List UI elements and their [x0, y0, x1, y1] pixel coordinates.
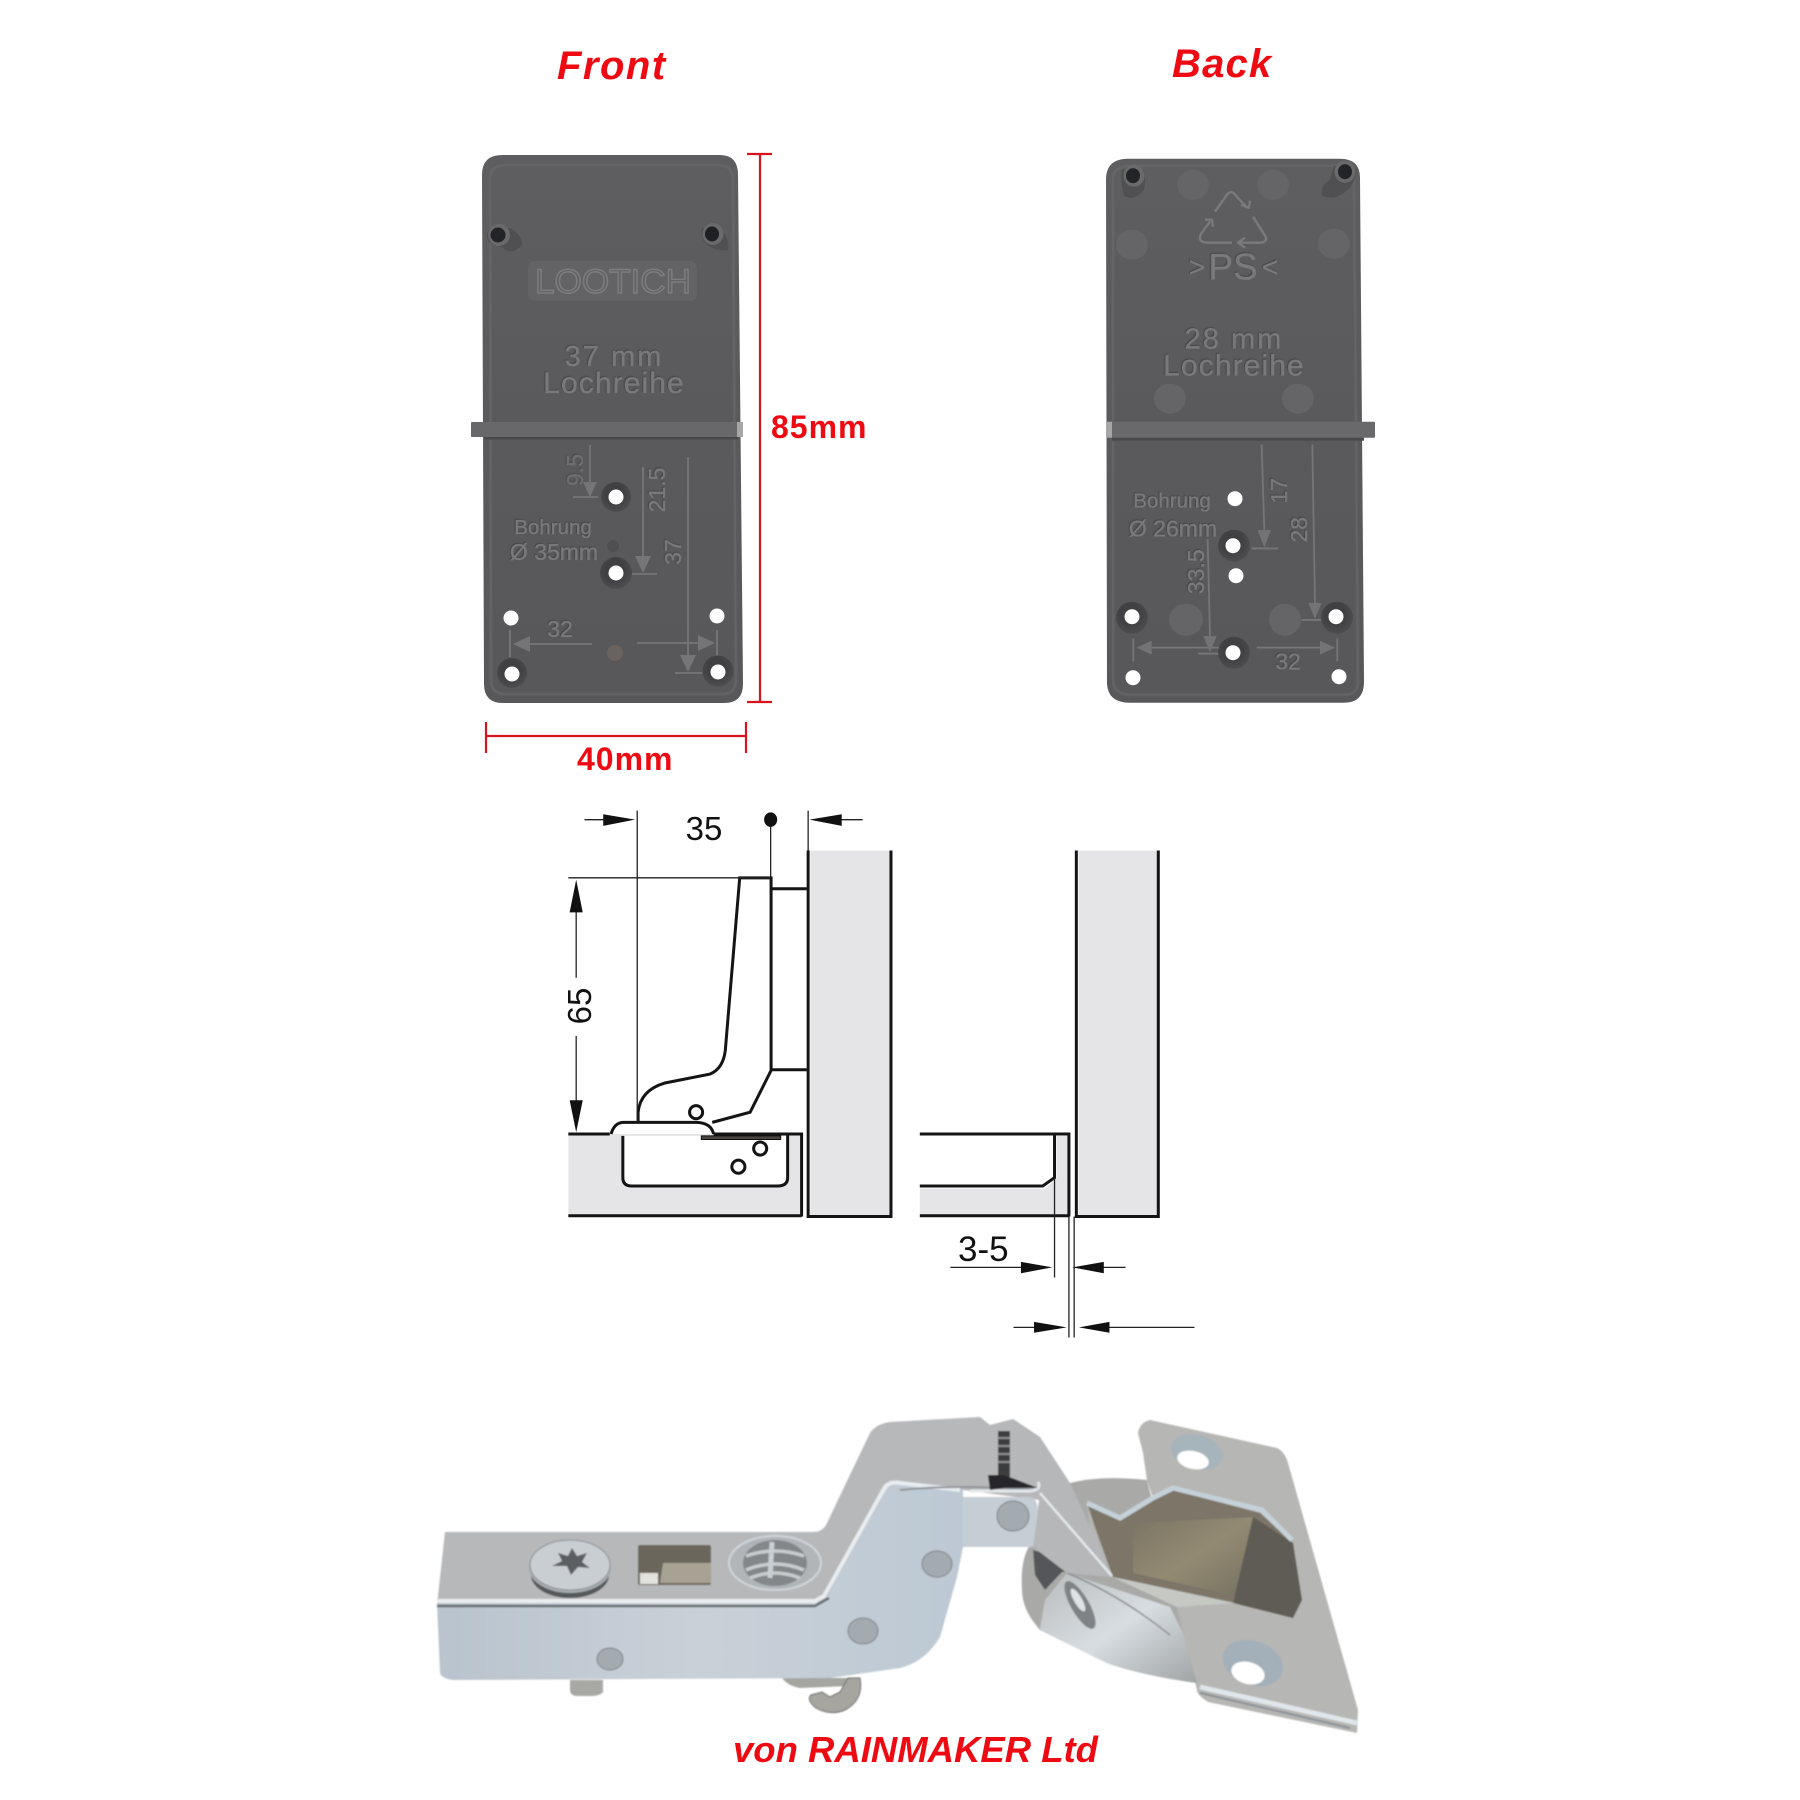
embossed labels: drill size and measures: 21.5: [644, 468, 670, 512]
embossed recycling code: PS: >: [1189, 252, 1205, 283]
panel fills: [920, 851, 1158, 1216]
embossed labels: drill size and measures: 32: [547, 616, 573, 642]
door side panel fills: [568, 851, 891, 1216]
lower link with slot: [1033, 1550, 1197, 1683]
rivets: [597, 1501, 1029, 1670]
embossed text: 37 mm Lochreihe: Lochreihe: [543, 367, 685, 400]
dimension: 85mm height: [747, 154, 868, 702]
right section: reveal detail: [920, 851, 1194, 1338]
mounting plate: [1087, 1420, 1358, 1733]
embossed labels: drill size and measures: 33.5: [1183, 549, 1209, 594]
guide rail: [471, 422, 743, 440]
embossed labels: drill size and measures: Bohrung: [514, 516, 592, 539]
photo illustration: cabinet hinge: [437, 1417, 1358, 1733]
dimension: 40mm width: 40mm: [577, 741, 674, 777]
embossed labels: drill size and measures: Ø 26mm: [1129, 516, 1217, 542]
dimension: 40mm width: [486, 722, 746, 777]
technical drawing: hinge mounting: [561, 810, 1194, 1338]
embossed text: 37 mm Lochreihe: 37 mm: [565, 341, 663, 373]
adjustment screws and window: [529, 1536, 821, 1598]
embossed labels: drill size and measures: 9.5: [562, 454, 588, 486]
embossed labels: drill size and measures: 17: [1266, 478, 1292, 503]
embossed text: 28 mm Lochreihe: Lochreihe: [1163, 350, 1305, 383]
spring: [988, 1431, 1038, 1490]
icon: recycling triangle: [1200, 192, 1266, 248]
embossed labels: drill size and measures: [510, 454, 686, 642]
embossed text: 28 mm Lochreihe: 28 mm: [1185, 324, 1283, 356]
plate body: [482, 155, 743, 703]
embossed text: 37 mm Lochreihe: [543, 341, 685, 400]
drill holes: [1116, 491, 1353, 685]
screw holes: [1167, 1429, 1290, 1694]
dimension arrows: [570, 812, 863, 1132]
embossed labels: drill size and measures: 32: [1275, 649, 1301, 675]
hook feet: [570, 1678, 861, 1713]
drill holes: [497, 482, 734, 688]
hinge outline: [568, 811, 891, 1217]
heading: Back: Back: [1172, 42, 1273, 86]
guide rail: [1107, 422, 1375, 441]
embossed dimension arrows: [1133, 445, 1337, 661]
embossed recycling code: PS: <: [1262, 252, 1278, 283]
panel: front template plate: [471, 155, 743, 703]
dimension: 85mm height: 85mm: [771, 409, 868, 445]
brand embossed label: LOOTICH: [535, 263, 691, 301]
hinge arm: [437, 1417, 1113, 1680]
embossed labels: drill size and measures: Bohrung: [1133, 490, 1211, 513]
reveal arrows: [950, 1262, 1194, 1333]
dimension label: 35: 35: [686, 810, 722, 847]
embossed labels: drill size and measures: Ø 35mm: [510, 539, 598, 565]
dimension label: 3-5: 3-5: [958, 1230, 1009, 1269]
dimension label: 65: 65: [561, 988, 598, 1024]
icon: front pegs: [487, 223, 728, 251]
credit line: von RAINMAKER Ltd: [733, 1729, 1099, 1770]
embossed dimension arrows: [510, 445, 717, 673]
embossed labels: drill size and measures: 37: [660, 539, 686, 565]
left section: hinge in cabinet: [568, 811, 891, 1217]
icon: back pegs: [1121, 161, 1356, 198]
faded ejector circles: [1116, 170, 1350, 636]
plate body: [1106, 159, 1364, 703]
panel: back template plate: [1106, 159, 1375, 703]
heading: Front: Front: [557, 44, 667, 88]
cup behind: [1022, 1478, 1197, 1683]
embossed text: 28 mm Lochreihe: [1163, 324, 1305, 383]
embossed labels: drill size and measures: [1129, 478, 1312, 675]
section outline: [920, 851, 1158, 1338]
embossed recycling code: PS: [1189, 247, 1278, 288]
embossed labels: drill size and measures: 28: [1286, 517, 1312, 542]
embossed recycling code: PS: PS: [1208, 247, 1258, 288]
